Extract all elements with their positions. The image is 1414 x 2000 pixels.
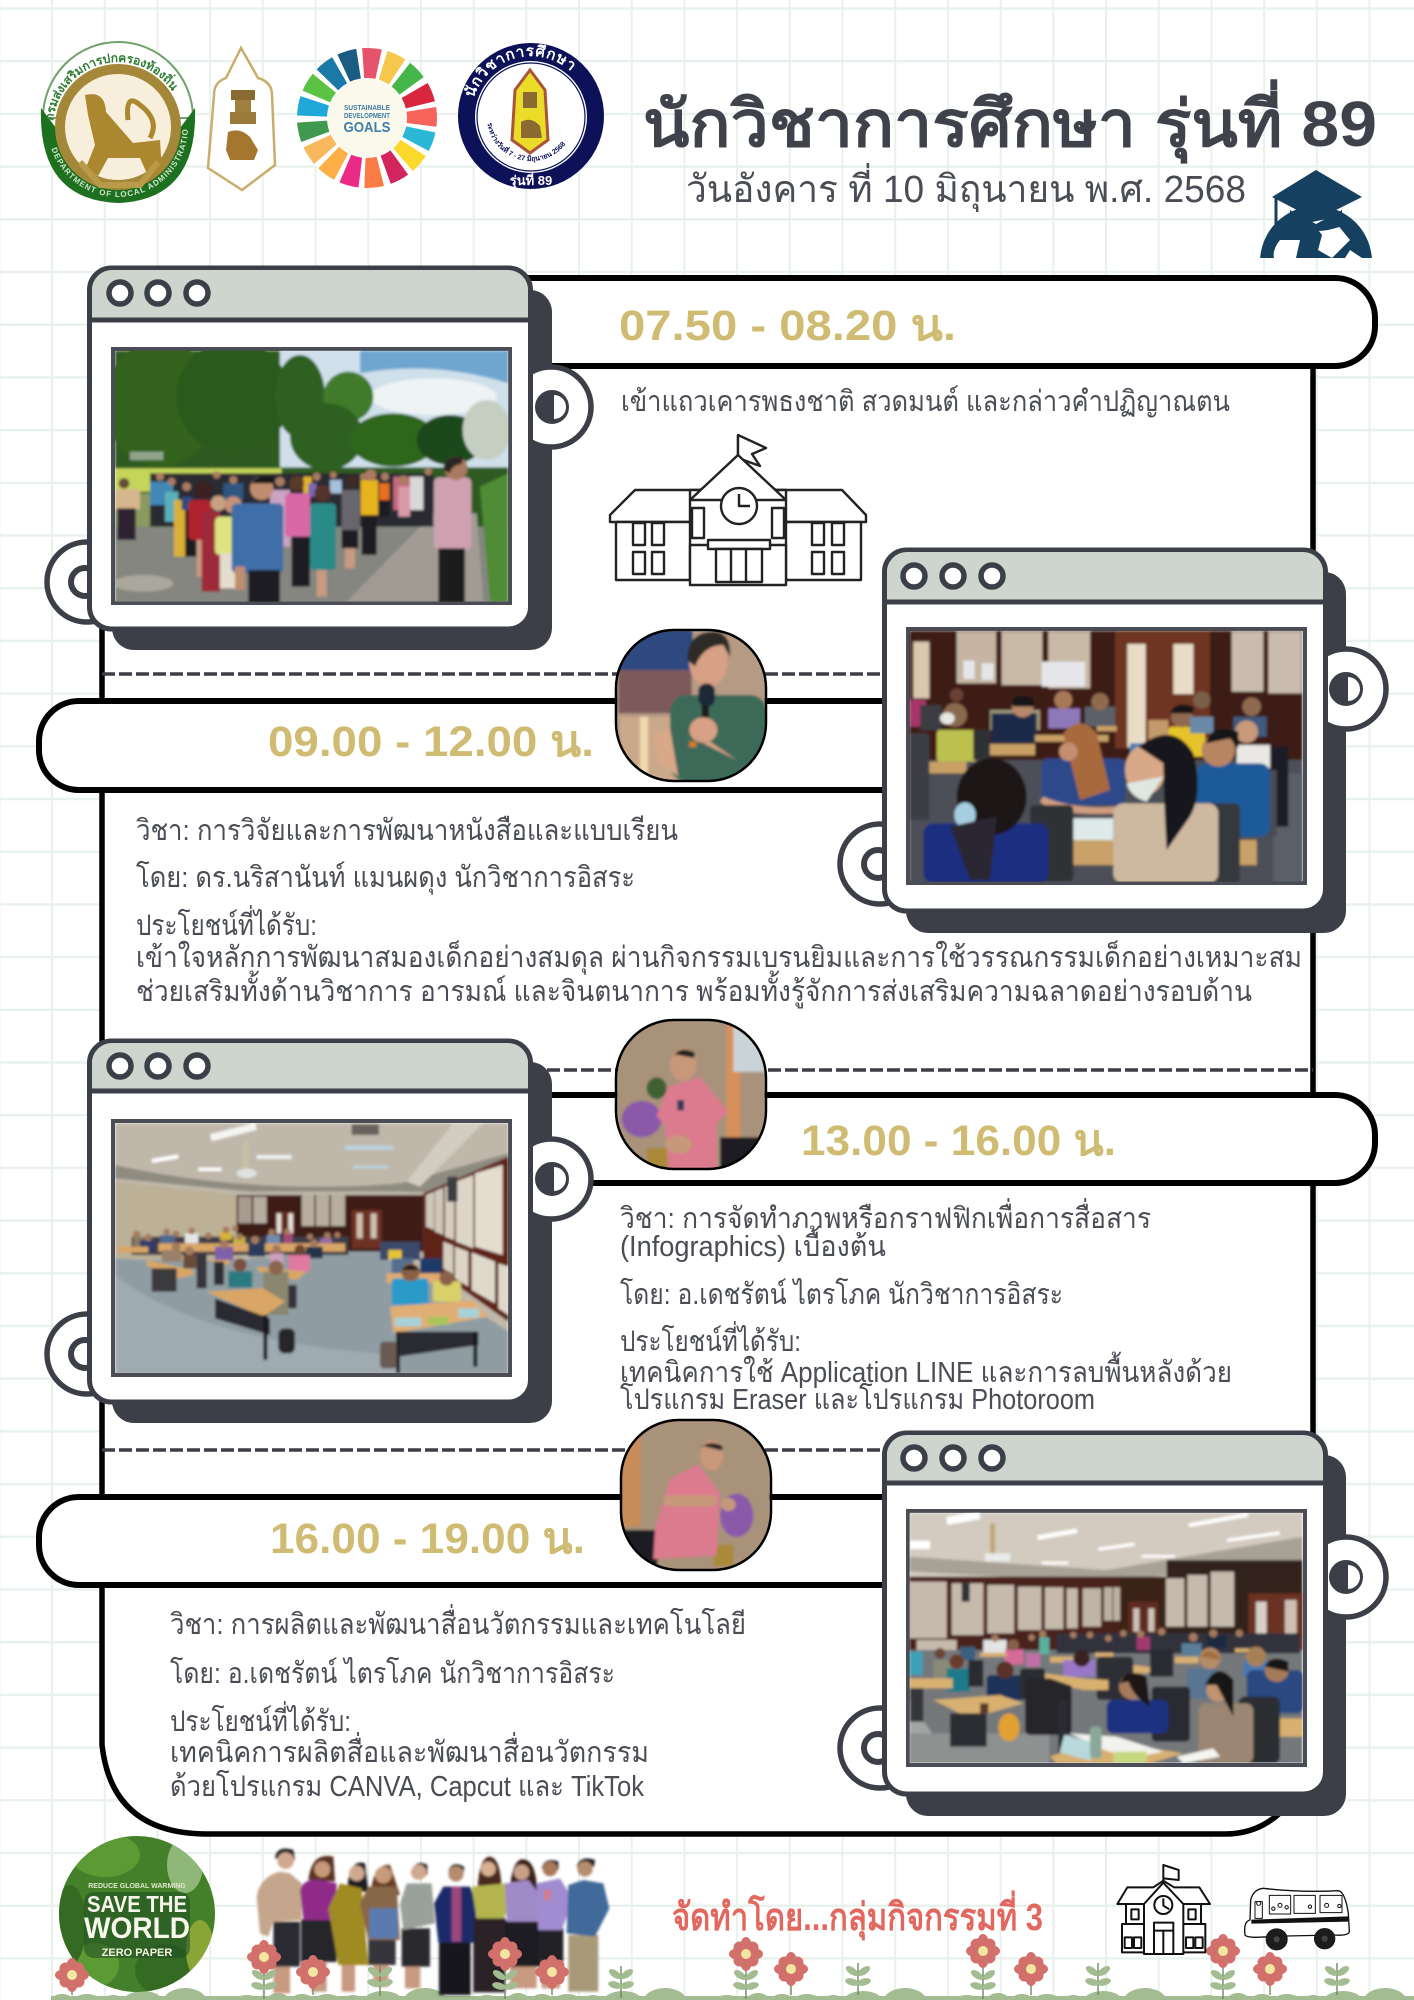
session 3 text [620,1198,1232,1416]
photo: classroom side view [909,631,1303,884]
card 3 with photo [47,1041,591,1423]
logo: Department of Local Administration: กรมส่งเสริมการปกครองท้องถิ่น [46,54,177,120]
card 2 with photo [840,550,1386,933]
icon: school building [610,435,866,585]
logo: class 89 badge: นักวิชาการศึกษา [464,44,574,96]
portrait: Dr. Narisanan [616,630,767,783]
logo: class 89 badge [458,42,604,190]
session 2 text: เข้าใจหลักการพัฒนาสมองเด็กอย่างสมดุล ผ่านกิจกรรมเบรนยิมและการใช้วรรณกรรมเด็กอย่างเหมาะสม [136,939,1302,975]
session 3 text: โปรแกรม Eraser และโปรแกรม Photoroom [620,1382,1095,1416]
session 4 text: วิชา: การผลิตและพัฒนาสื่อนวัตกรรมและเทคโนโลยี [170,1604,746,1641]
session 4 text: ประโยชน์ที่ได้รับ: [170,1701,351,1738]
badge: save the world: SAVE THE [87,1891,187,1917]
session 4 text: เทคนิคการผลิตสื่อและพัฒนาสื่อนวัตกรรม [170,1732,649,1769]
session 3 text: เทคนิคการใช้ Application LINE และการลบพื้นหลังด้วย [620,1351,1232,1389]
logo: class 89 badge: ระหว่างวันที่ 7 - 27 มิถุนายน 2568 [488,122,565,163]
badge: save the world: ZERO PAPER [102,1947,172,1959]
badge: save the world: WORLD [84,1912,190,1945]
session 2 text: โดย: ดร.นริสานันท์ แมนผดุง นักวิชาการอิสระ [136,860,635,895]
flowers and sprouts border [55,1934,1351,1999]
divider 2 [530,1068,1313,1072]
time pill 3 [440,1095,1375,1183]
portrait: Ajarn Dechrat 2 [621,1420,771,1572]
photo: seminar room group [115,1123,508,1376]
icon: school bus [1245,1888,1349,1950]
date subtitle: วันอังคาร ที่ 10 มิถุนายน พ.ศ. 2568 [686,163,1246,212]
time label 4: 16.00 - 19.00 น. [270,1515,585,1563]
logo: office emblem shield [208,48,275,190]
session 4 text: โดย: อ.เดชรัตน์ ไตรโภค นักวิชาการอิสระ [170,1656,615,1690]
bottom meadow of bushes [0,1988,1414,2000]
session 2 text: ประโยชน์ที่ได้รับ: [136,905,317,942]
icon: graduation cap and globe [1260,170,1372,258]
session 3 text: (Infographics) เบื้องต้น [620,1225,886,1263]
session 2 text: วิชา: การวิจัยและการพัฒนาหนังสือและแบบเรียน [136,815,678,847]
session 2 text [136,815,1302,1009]
badge: save the world: REDUCE GLOBAL WARMING [88,1883,186,1890]
time pill 2 [39,701,969,790]
time label 3: 13.00 - 16.00 น. [801,1117,1116,1165]
session 2 text: ช่วยเสริมทั้งด้านวิชาการ อารมณ์ และจินตนาการ พร้อมทั้งรู้จักการส่งเสริมความฉลาดอย่างรอบด้าน [136,970,1252,1009]
timeline frame [102,330,1313,1834]
time label 1: 07.50 - 08.20 น. [619,302,956,350]
title: นักวิชาการศึกษา รุ่นที่ 89 [643,79,1377,164]
card 1 with photo [47,268,591,650]
divider 1 [102,672,884,676]
divider 3 [102,1448,884,1452]
badge: save the world [54,1833,215,1996]
time pill 4 [39,1497,969,1585]
photo: students at desks [909,1511,1303,1765]
time pill 1 [440,278,1375,366]
portrait: Ajarn Dechrat 1 [616,1020,767,1173]
logo: Sustainable Development Goals wheel: GOALS [344,119,390,136]
footer credit: จัดทำโดย...กลุ่มกิจกรรมที่ 3 [672,1890,1043,1941]
logo: Sustainable Development Goals wheel [289,40,445,196]
photo: morning flag assembly [103,340,511,607]
session 4 text: ด้วยโปรแกรม CANVA, Capcut และ TikTok [170,1769,644,1803]
logo: Sustainable Development Goals wheel: DEVELOPMENT [344,113,391,120]
logo: Department of Local Administration [40,41,196,203]
card 4 with photo [840,1433,1386,1816]
session 3 text: วิชา: การจัดทำภาพหรือกราฟฟิกเพื่อการสื่อสาร [620,1198,1151,1235]
session 1 text: เข้าแถวเคารพธงชาติ สวดมนต์ และกล่าวคำปฏิญาณตน [621,385,1230,418]
session 4 text [170,1604,746,1803]
time label 2: 09.00 - 12.00 น. [268,718,594,766]
icon: small school [1117,1865,1210,1954]
session 3 text: โดย: อ.เดชรัตน์ ไตรโภค นักวิชาการอิสระ [620,1277,1063,1311]
group photo of team [257,1849,609,1995]
logo: Sustainable Development Goals wheel: SUSTAINABLE [344,105,390,112]
session 3 text: ประโยชน์ที่ได้รับ: [620,1321,801,1358]
logo: class 89 badge: รุ่นที่ 89 [510,171,552,189]
